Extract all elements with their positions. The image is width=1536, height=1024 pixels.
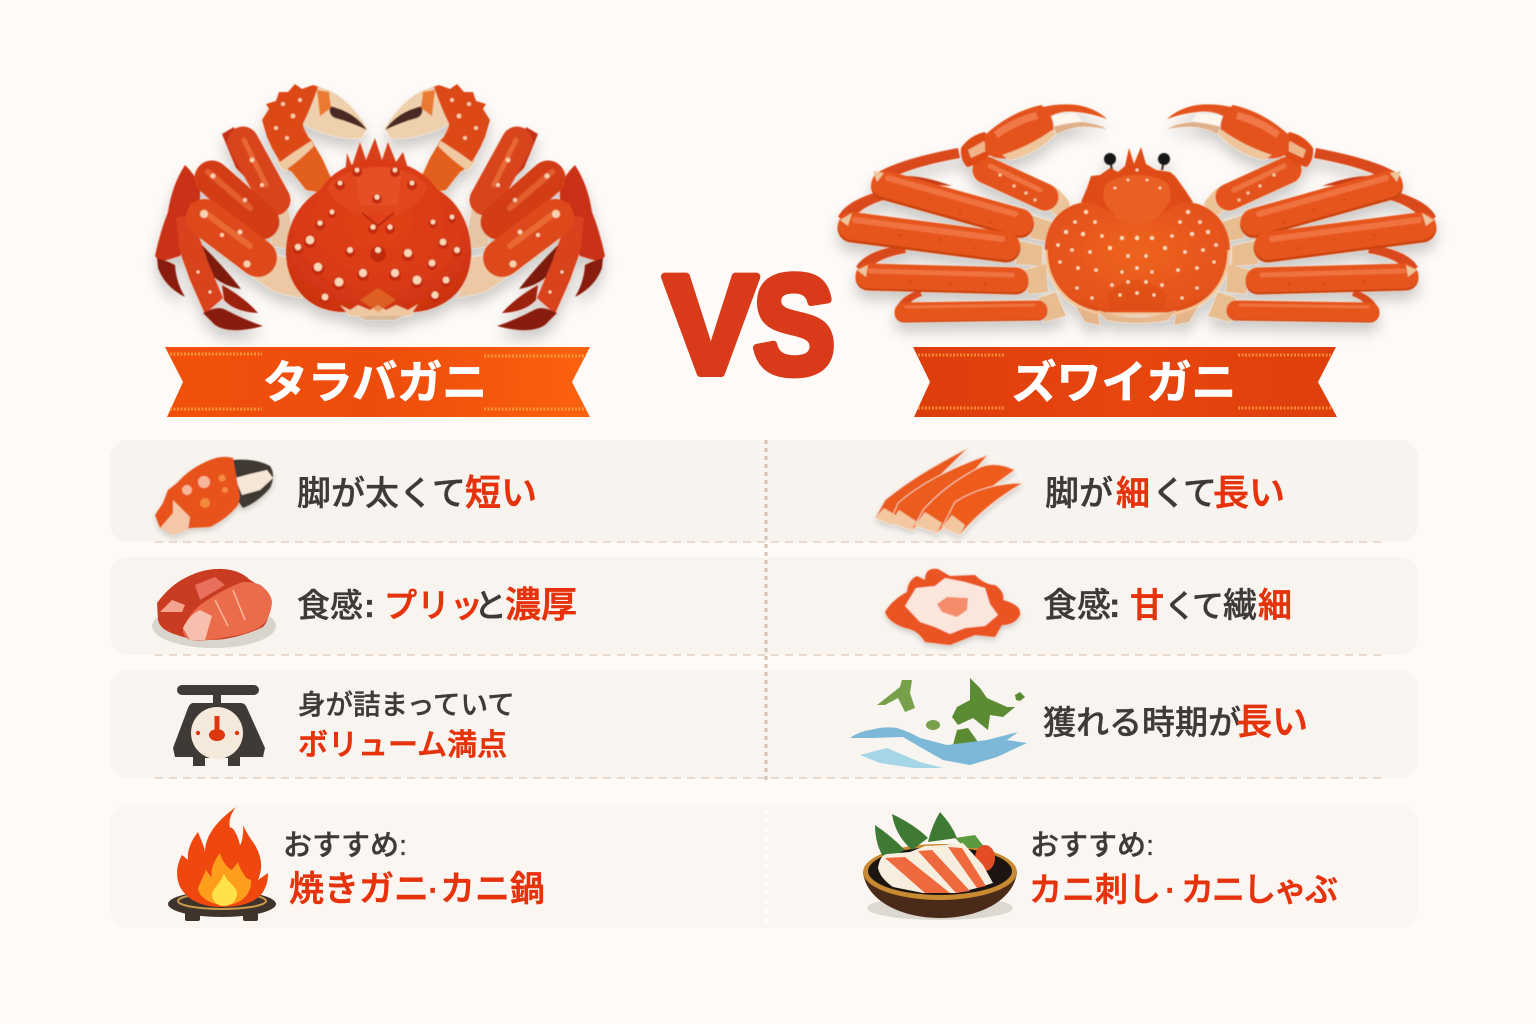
panel: row 1 leg comparison [110,440,1418,542]
text: packed with meat, full volume: 身が詰まっていて [298,689,515,720]
eyes [1104,153,1170,165]
text: texture sweet and delicate: 食感 [1043,587,1111,625]
text: texture plump and rich: と [474,587,507,624]
text: long fishing season: 獲れる時期が [1043,704,1241,741]
text: legs thin and long: くて [1152,475,1215,513]
text: texture sweet and delicate: : [1109,587,1120,625]
text: legs thick and short: 短い [465,472,537,513]
text: recommended crab sashimi and crab shabu: カニ刺し [1029,871,1161,908]
text: texture sweet and delicate: 甘 [1130,587,1164,625]
king crab illustration [155,84,605,330]
text: texture plump and rich: : [364,587,375,624]
VS heading [664,246,835,403]
icon: king crab meat [152,569,276,648]
text: legs thin and long: 脚が [1045,475,1113,513]
text: legs thin and long: 細 [1116,475,1150,513]
text: recommended crab sashimi and crab shabu [1029,830,1337,910]
icon: snow crab legs [875,448,1023,535]
icon: kitchen scale [173,685,265,766]
panel: row 3 volume and season [110,670,1418,778]
text: recommended grilled crab and crab hot pot: カニ [440,870,510,909]
icon: snow crab flaked meat [885,569,1020,645]
icon: sashimi bowl [863,812,1017,920]
text: recommended grilled crab and crab hot pot: · [426,866,439,910]
text: recommended grilled crab and crab hot pot: 鍋 [510,870,545,909]
snow crab illustration [838,104,1436,325]
text: legs thin and long: 長い [1213,472,1285,513]
text: texture sweet and delicate: 繊 [1223,587,1257,625]
VS heading: S [753,247,835,403]
banner: タラバガニ [165,347,590,417]
text: texture sweet and delicate: 細 [1258,587,1292,625]
text: recommended crab sashimi and crab shabu: おすすめ: [1030,830,1154,862]
text: recommended grilled crab and crab hot pot: 焼きガニ [289,870,429,909]
text: legs thick and short: 脚が太くて [297,475,466,513]
text: texture sweet and delicate: くて [1164,588,1221,624]
banner: ズワイガニ [913,347,1337,417]
icon: king crab claw [155,457,273,535]
VS heading: V [664,246,757,403]
icon: Japan map and waves [850,678,1027,768]
text: recommended crab sashimi and crab shabu: カニしゃぶ [1181,871,1337,908]
icon: flame on grill [168,807,276,921]
panel: row 4 recommendations [110,805,1418,928]
text: texture plump and rich: 濃厚 [505,584,577,625]
center divider [764,440,768,780]
text: texture plump and rich: プリッ [384,587,483,624]
text: packed with meat, full volume [298,689,515,762]
text: recommended grilled crab and crab hot pot: おすすめ: [283,830,407,862]
banner label: ズワイガニ [1011,357,1237,408]
text: texture plump and rich: 食感 [297,587,363,624]
text: long fishing season: 長い [1236,701,1308,742]
panel: row 2 texture [110,557,1418,655]
text: recommended grilled crab and crab hot pot [283,830,545,910]
banner label: タラバガニ [263,357,487,408]
text: packed with meat, full volume: ボリューム満点 [298,729,507,762]
text: recommended crab sashimi and crab shabu: · [1163,866,1176,910]
